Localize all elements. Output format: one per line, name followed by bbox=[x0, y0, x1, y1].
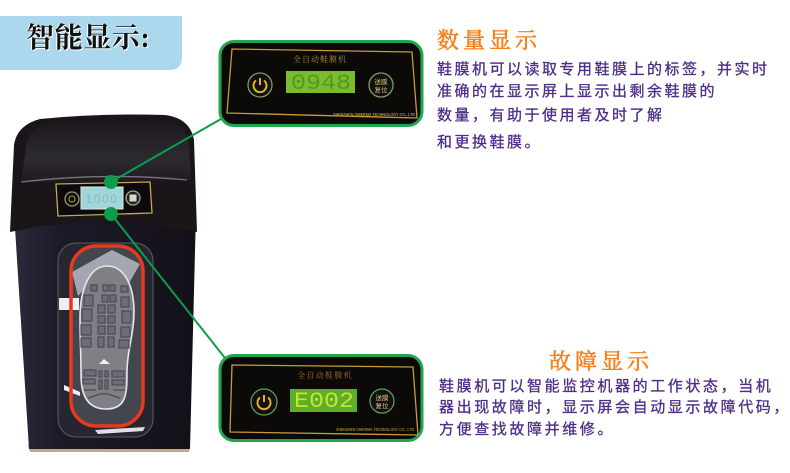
text: fault description: 鞋膜机可以智能监控机器的工作状态，当机 bbox=[439, 378, 773, 395]
connector dot: quantity bbox=[104, 175, 118, 189]
panel: quantity display bbox=[220, 42, 422, 126]
panel: fault display: E002 bbox=[294, 389, 354, 414]
connector line: quantity display bbox=[111, 119, 221, 182]
control panel bbox=[56, 182, 152, 216]
panel: quantity display: 送膜 bbox=[374, 77, 388, 86]
panel: fault display: 复位 bbox=[376, 401, 389, 410]
control panel: 1000 bbox=[86, 192, 118, 206]
text: quantity description: 鞋膜机可以读取专用鞋膜上的标签，并实时 bbox=[437, 61, 770, 78]
panel: fault display bbox=[220, 356, 422, 440]
shoe cover window bbox=[58, 243, 153, 437]
base bbox=[28, 445, 190, 452]
panel: quantity display: 0948 bbox=[291, 71, 351, 96]
panel: fault display: SHENZHEN SHIERMA TECHNOLOGY CO., LTD bbox=[336, 427, 415, 432]
text: fault description: 方便查找故障并维修。 bbox=[439, 421, 615, 438]
icon: power button bbox=[251, 389, 277, 415]
lower body bbox=[14, 212, 196, 449]
text: quantity description: 准确的在显示屏上显示出剩余鞋膜的 bbox=[437, 83, 717, 100]
text: fault description bbox=[439, 378, 790, 438]
panel: fault display: 全自动鞋膜机 bbox=[297, 370, 353, 380]
text: fault description: 器出现故障时，显示屏会自动显示故障代码， bbox=[439, 399, 790, 416]
shoe sole bbox=[80, 266, 134, 409]
heading: fault display: 故障显示 bbox=[549, 349, 653, 374]
text: quantity description bbox=[437, 61, 770, 151]
panel: quantity display: 全自动鞋膜机 bbox=[293, 54, 347, 64]
title: 智能显示: bbox=[26, 23, 150, 54]
panel: quantity display: 复位 bbox=[374, 85, 388, 94]
icon: power button bbox=[248, 73, 272, 97]
red ring bbox=[71, 246, 143, 426]
heading: quantity display: 数量显示 bbox=[437, 28, 541, 53]
top cover bbox=[10, 114, 197, 232]
connector dot: fault bbox=[104, 207, 118, 221]
machine illustration bbox=[10, 114, 197, 452]
title badge bbox=[0, 16, 182, 70]
connector line: fault display bbox=[111, 214, 225, 358]
text: quantity description: 数量，有助于使用者及时了解 bbox=[437, 107, 665, 124]
text: quantity description: 和更换鞋膜。 bbox=[437, 134, 542, 151]
panel: quantity display: SHENZHEN SHIERMA TECHNOLOGY CO., LTD bbox=[333, 112, 416, 117]
panel: fault display: 送膜 bbox=[376, 393, 389, 402]
